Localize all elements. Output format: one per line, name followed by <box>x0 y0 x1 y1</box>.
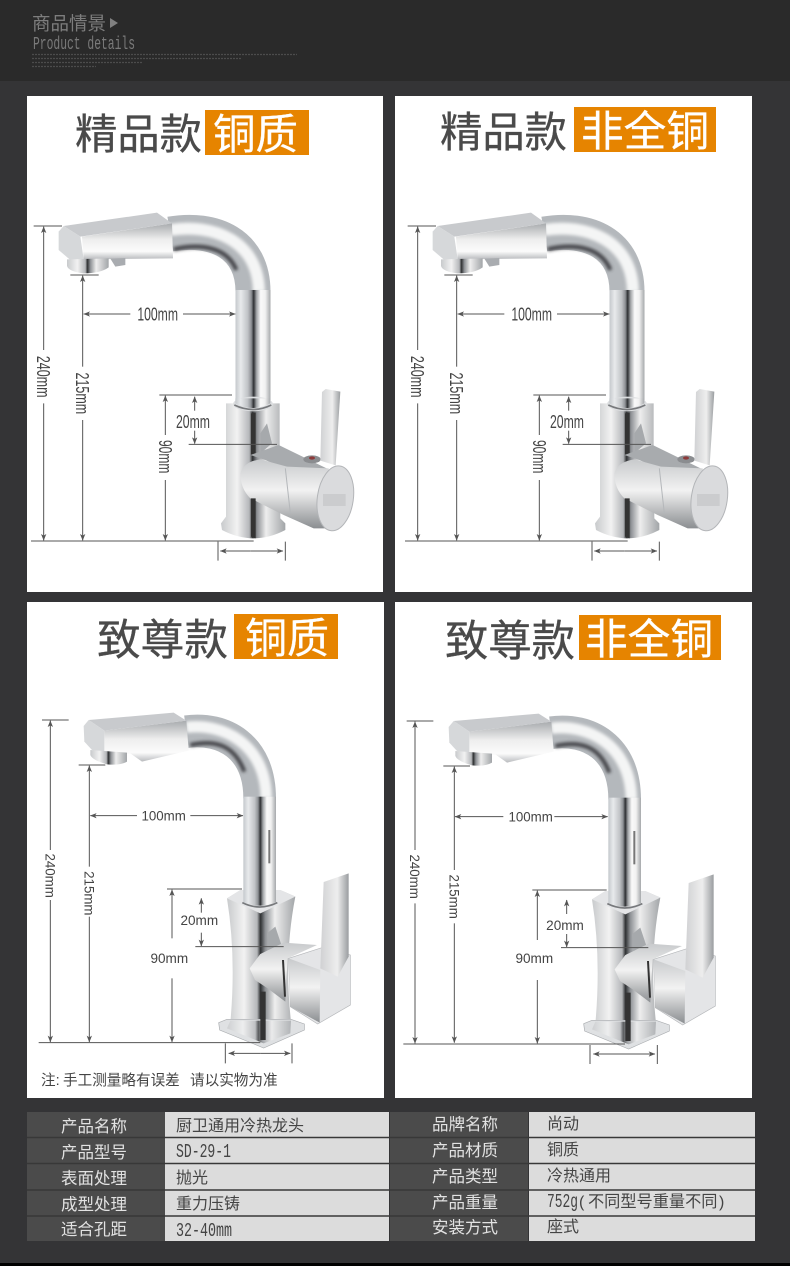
spec table <box>27 1112 755 1242</box>
label 20mm: 20mm <box>180 912 218 928</box>
label 90mm: 90mm <box>150 950 188 966</box>
label 20mm: 20mm <box>546 917 584 933</box>
row backgrounds <box>27 1112 755 1241</box>
values right column: ) <box>719 1194 724 1211</box>
label 90mm: 90mm <box>515 950 553 966</box>
labels right column: 安装方式 <box>432 1218 498 1237</box>
label 215mm: 215mm <box>81 871 97 915</box>
values right column: 752g <box>547 1191 578 1213</box>
tag: non-full copper: 非全铜 <box>581 108 709 155</box>
header subtitle: Product details <box>33 35 135 55</box>
labels right column <box>432 1115 498 1237</box>
values left column: 32-40mm <box>176 1220 232 1242</box>
label 215mm: 215mm <box>446 874 462 919</box>
label 100mm: 100mm <box>511 304 552 325</box>
dimension lines <box>405 226 659 561</box>
values right column: 尚动 <box>547 1115 579 1133</box>
label 20mm: 20mm <box>176 411 210 432</box>
faucet illustration <box>59 213 358 538</box>
faucet with dimensions <box>31 213 358 561</box>
panel: premium non-full copper <box>395 96 752 592</box>
label 215mm: 215mm <box>446 372 467 414</box>
labels right column: 产品类型 <box>432 1167 498 1186</box>
values right column: 座式 <box>547 1218 579 1236</box>
header band <box>0 0 790 81</box>
label 240mm: 240mm <box>33 356 54 397</box>
tag: copper: 铜质 <box>245 615 329 662</box>
label 240mm: 240mm <box>42 853 58 898</box>
values left column: SD-29-1 <box>176 1141 231 1163</box>
labels left column: 产品型号 <box>61 1143 127 1162</box>
tag: non-full copper: 非全铜 <box>585 616 713 663</box>
faucet illustration <box>449 714 715 1049</box>
heading: premium: 精品款 <box>75 111 202 158</box>
labels left column: 产品名称 <box>61 1117 127 1136</box>
heading: premium: 精品款 <box>440 109 567 156</box>
heading: supreme: 致尊款 <box>445 618 575 666</box>
note: 手工测量略有误差 <box>63 1072 180 1089</box>
values left column <box>176 1117 304 1242</box>
faucet with dimensions <box>405 213 732 561</box>
note: 注: <box>41 1073 60 1089</box>
panel: supreme copper <box>27 602 384 1098</box>
label 100mm: 100mm <box>508 809 553 825</box>
values left column: 重力压铸 <box>176 1195 240 1213</box>
values left column: 抛光 <box>176 1169 208 1187</box>
heading: supreme: 致尊款 <box>97 617 228 665</box>
dimension lines <box>39 720 292 1063</box>
faucet illustration <box>433 213 732 538</box>
header title: 商品情景 <box>32 13 106 34</box>
values left column: 厨卫通用冷热龙头 <box>176 1117 304 1135</box>
labels left column: 表面处理 <box>61 1169 127 1188</box>
labels right column: 产品重量 <box>432 1193 498 1212</box>
panel: supreme non-full copper <box>395 602 752 1098</box>
bottom edge <box>0 1263 790 1266</box>
values right column: ( <box>579 1194 585 1211</box>
labels left column: 适合孔距 <box>61 1220 127 1239</box>
dimension lines <box>31 226 285 561</box>
label 100mm: 100mm <box>137 304 178 325</box>
header fine print <box>32 54 297 66</box>
label 90mm: 90mm <box>155 440 176 473</box>
values right column <box>547 1115 724 1236</box>
label 100mm: 100mm <box>141 808 186 824</box>
values right column: 铜质 <box>547 1141 579 1159</box>
tag: copper: 铜质 <box>213 111 298 158</box>
values right column: 不同型号重量不同 <box>588 1193 718 1211</box>
faucet with dimensions <box>39 713 350 1063</box>
labels left column: 成型处理 <box>61 1195 127 1214</box>
labels right column: 品牌名称 <box>432 1115 498 1134</box>
label 20mm: 20mm <box>550 411 584 432</box>
labels left column <box>61 1117 127 1239</box>
faucet illustration <box>84 713 350 1048</box>
label 240mm: 240mm <box>407 356 428 397</box>
label 240mm: 240mm <box>407 854 423 899</box>
note: 请以实物为准 <box>190 1072 278 1089</box>
panel: premium copper <box>27 96 383 592</box>
labels right column: 产品材质 <box>432 1141 498 1160</box>
values right column: 冷热通用 <box>547 1167 611 1185</box>
label 90mm: 90mm <box>529 440 550 473</box>
dimension lines <box>403 721 657 1064</box>
label 215mm: 215mm <box>72 372 93 414</box>
icon: header triangle <box>110 18 118 28</box>
faucet with dimensions <box>403 714 715 1064</box>
